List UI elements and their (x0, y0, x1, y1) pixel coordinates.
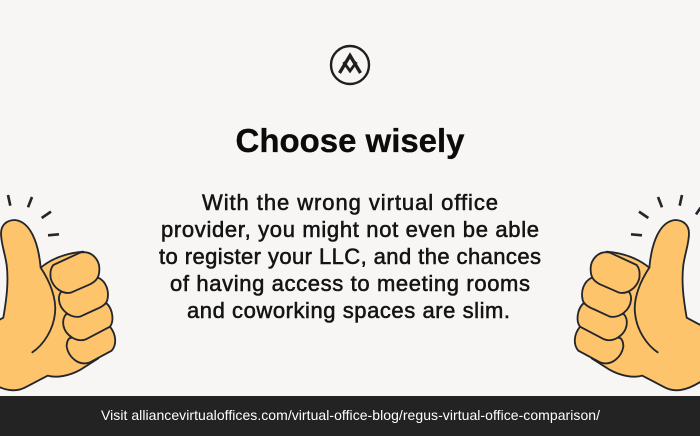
icon: company logo (331, 46, 369, 84)
body text: of having access to meeting rooms (170, 271, 530, 296)
footer link text: Visit alliancevirtualoffices.com/virtual-office-blog/regus-virtual-office-comparison/ (101, 407, 600, 423)
body text: and coworking spaces are slim. (187, 298, 510, 323)
icon: right thumbs up (575, 195, 700, 390)
footer bar (0, 396, 700, 436)
title: Choose wisely (236, 122, 465, 159)
body text: With the wrong virtual office (202, 190, 498, 215)
body text: to register your LLC, and the chances (159, 244, 541, 269)
body text (159, 190, 541, 323)
icon: left thumbs up (0, 195, 115, 390)
body text: provider, you might not even be able (161, 217, 539, 242)
